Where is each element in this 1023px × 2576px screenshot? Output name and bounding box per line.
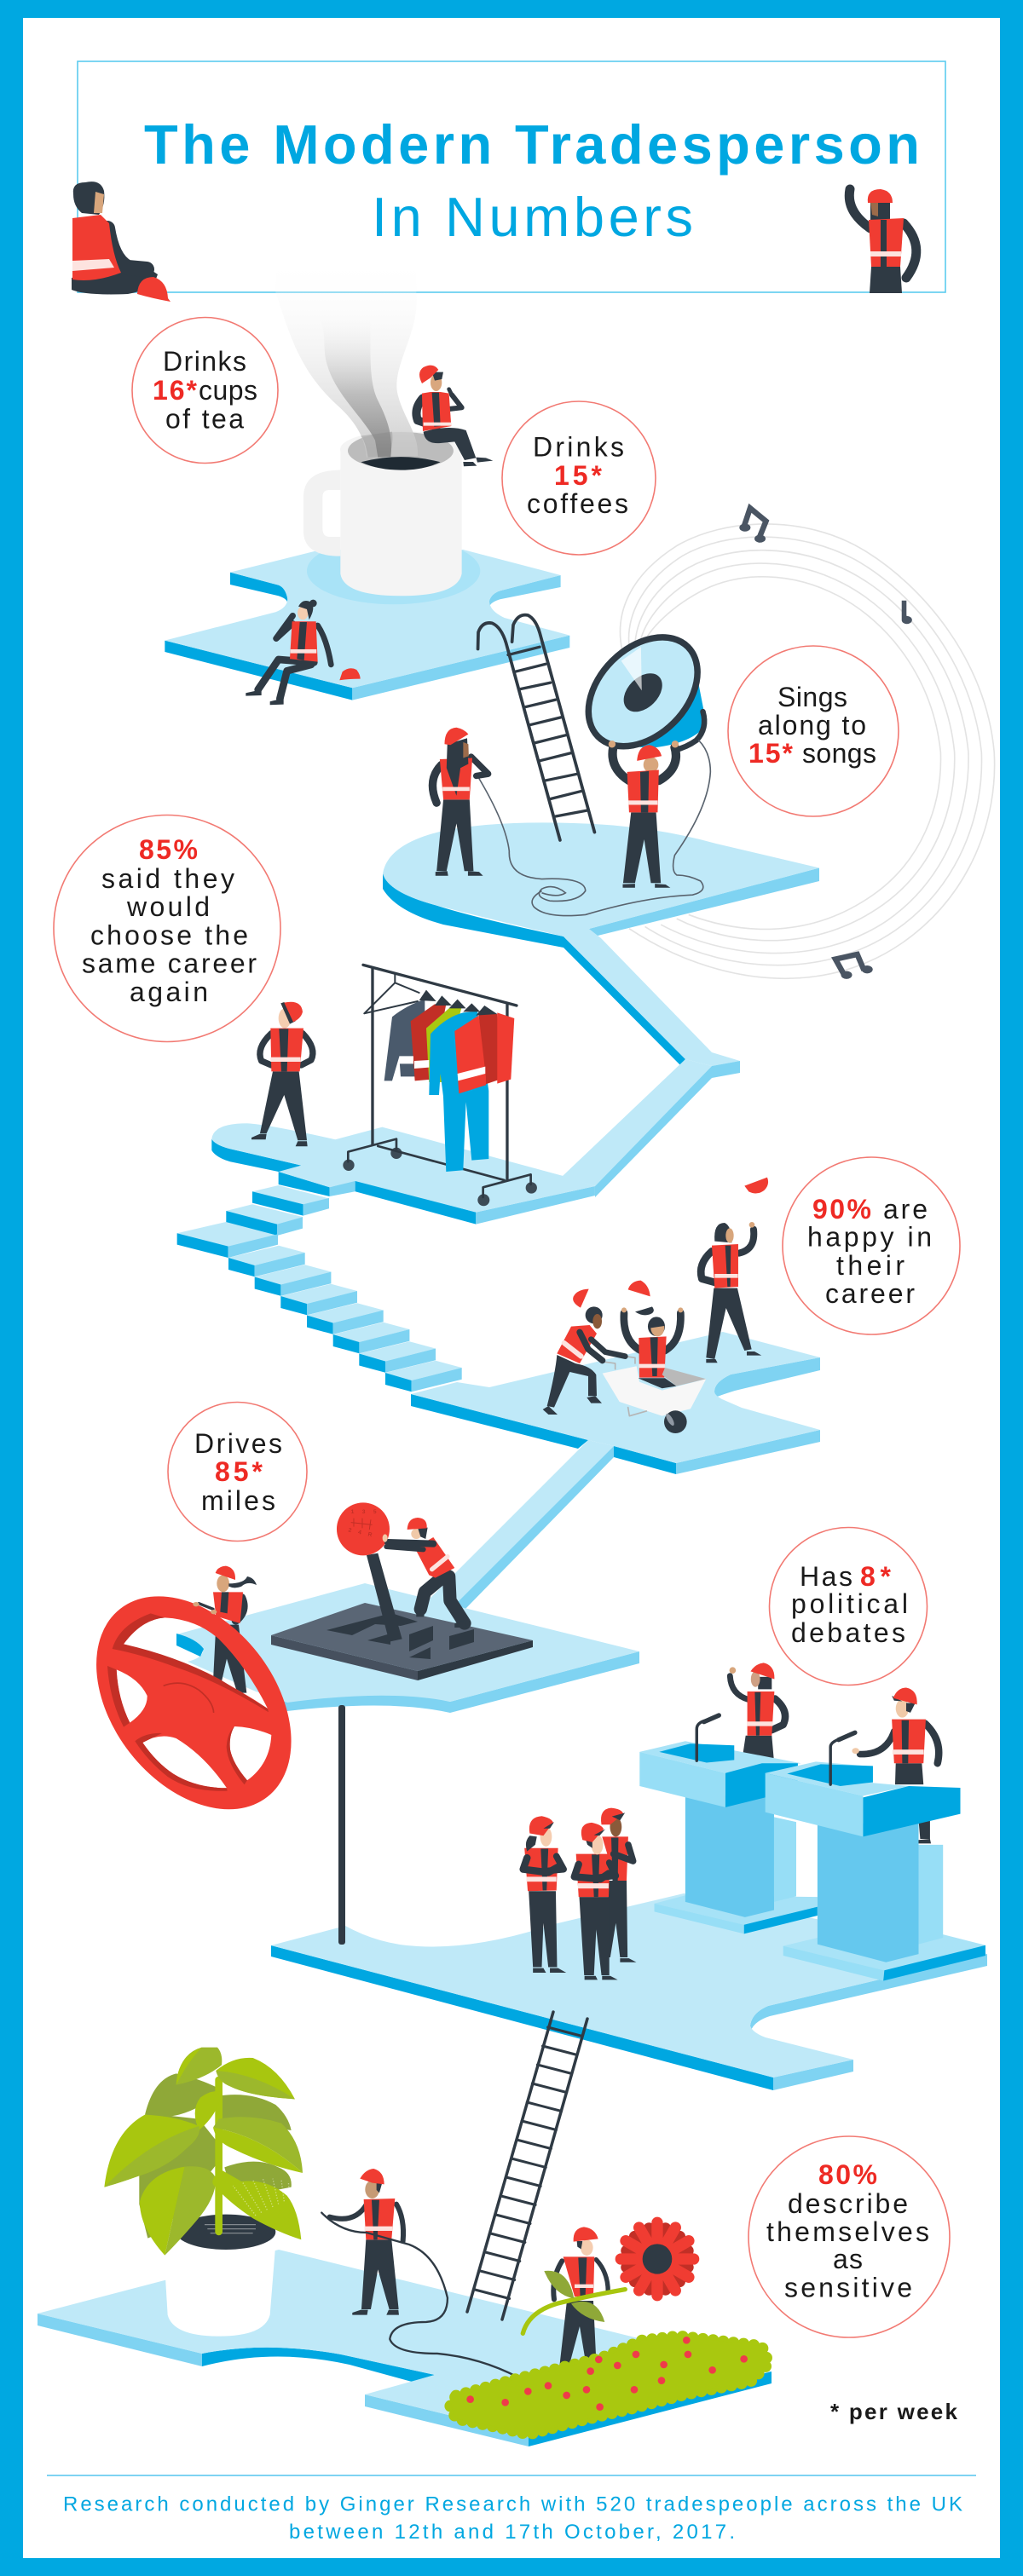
figure: middle worker in group xyxy=(575,1823,618,1980)
figure: seated worker at title xyxy=(72,182,170,302)
gear gate base xyxy=(271,1603,533,1680)
garden hose xyxy=(321,2213,518,2377)
platform 3 xyxy=(211,1123,595,1225)
callout: songs: along to xyxy=(758,710,866,741)
callout: coffees xyxy=(502,401,656,555)
figure: waving worker at title xyxy=(849,189,916,293)
gear stick: 1 3 5 xyxy=(351,1509,377,1515)
callout: happy in career: their xyxy=(836,1250,905,1281)
figure: woman in wheelbarrow xyxy=(621,1306,683,1378)
podium right xyxy=(783,1824,985,1981)
platform 1 xyxy=(165,550,569,700)
callout: miles: Drives xyxy=(194,1428,282,1459)
title: In Numbers xyxy=(372,186,693,248)
callout: cups of tea: cups xyxy=(199,375,257,406)
figure: worker pushing wheelbarrow xyxy=(543,1306,635,1415)
figure: driver behind steering wheel xyxy=(213,1566,257,1693)
pole xyxy=(338,1705,345,1945)
footer divider xyxy=(47,2475,976,2476)
hedge xyxy=(450,2337,769,2435)
callout: same career: would xyxy=(126,891,210,922)
callout: miles xyxy=(168,1403,307,1541)
callout: political debates: 8* xyxy=(860,1561,892,1592)
figure: worker pushing gear stick xyxy=(383,1518,467,1628)
callout: happy in career: are xyxy=(883,1194,928,1225)
title box xyxy=(78,61,945,292)
ladder between lower platforms xyxy=(467,2012,587,2320)
figure: worker looking at rack xyxy=(251,1002,313,1146)
callout: sensitive: as xyxy=(833,2244,863,2274)
panel: garden platform xyxy=(38,2250,772,2446)
callout: cups of tea: Drinks xyxy=(163,346,246,377)
microphone right xyxy=(830,1732,855,1784)
callout: same career: choose the xyxy=(90,920,248,951)
callout: happy in career: career xyxy=(825,1278,915,1309)
callout: political debates xyxy=(769,1527,928,1686)
callout: happy in career: happy in xyxy=(807,1222,932,1253)
microphone cord xyxy=(477,741,710,916)
panel: gear stick and drivers xyxy=(96,1502,467,1809)
icon: flying helmets xyxy=(573,1178,768,1308)
callout: same career: said they xyxy=(101,863,234,894)
figure: debater right xyxy=(852,1687,939,1843)
saucer xyxy=(307,550,481,605)
callout: coffees: 15* xyxy=(554,460,603,491)
icon: music note xyxy=(902,601,912,624)
callout: sensitive: themselves xyxy=(766,2216,929,2247)
figure: debater left xyxy=(730,1663,785,1761)
figure: worker sitting on mug xyxy=(416,366,493,466)
podium left xyxy=(655,1796,818,1933)
callout: coffees: coffees xyxy=(527,488,628,519)
flower xyxy=(523,2222,694,2333)
callout: same career: same career xyxy=(82,948,257,978)
callout: same career: again xyxy=(130,977,208,1007)
callout: miles: 85* xyxy=(215,1456,263,1487)
callout: sensitive: 80% xyxy=(818,2159,877,2190)
figure: left worker in group xyxy=(523,1816,566,1973)
callout: happy in career xyxy=(783,1157,960,1334)
callout: songs: 15* xyxy=(748,738,794,769)
wheelbarrow xyxy=(603,1366,706,1433)
panel: singing platform with ramp xyxy=(383,822,819,1197)
callout: songs: songs xyxy=(802,738,876,769)
steering wheel xyxy=(96,1596,292,1809)
callout: coffees: Drinks xyxy=(533,431,624,462)
callout: happy in career: 90% xyxy=(812,1194,871,1225)
figure: worker holding speaker xyxy=(609,741,679,888)
gear stick: 2 4 R xyxy=(348,1527,373,1538)
footer: research note xyxy=(63,2493,962,2544)
clothes rack xyxy=(343,965,537,1206)
callout: cups of tea: of tea xyxy=(165,404,244,435)
callout: songs xyxy=(728,646,899,816)
callout: political debates: Has xyxy=(800,1561,852,1592)
title: The Modern Tradesperson xyxy=(144,113,920,176)
callout: cups of tea xyxy=(132,317,278,464)
callout: miles: miles xyxy=(201,1485,275,1516)
icon: music note xyxy=(835,954,873,979)
note: per week: * per week xyxy=(830,2399,958,2424)
title xyxy=(144,113,920,248)
panel: platform 4 with ramp xyxy=(411,1332,820,1609)
figure: worker holding flower xyxy=(553,2227,608,2369)
speaker xyxy=(567,616,719,768)
panel: lower platform with podiums xyxy=(271,1893,987,2090)
panel: clothes rack platform xyxy=(177,965,595,1258)
footer: research note: Research conducted by Ginger Research with 520 tradespeople across the UK xyxy=(63,2493,962,2515)
gear stick xyxy=(337,1502,402,1642)
callout: sensitive xyxy=(748,2136,950,2337)
steam xyxy=(275,256,418,458)
callout: sensitive: describe xyxy=(788,2188,908,2219)
stairs lower flight xyxy=(228,1246,462,1392)
callout: same career: 85% xyxy=(139,834,198,865)
figure: woman celebrating xyxy=(701,1222,761,1363)
callout: sensitive: sensitive xyxy=(784,2272,912,2302)
music stave lines xyxy=(620,524,995,978)
figure: back worker in group xyxy=(601,1808,636,1962)
panel: wheelbarrow scene xyxy=(543,1178,768,1433)
callout: songs: Sings xyxy=(777,682,847,712)
plant pot xyxy=(162,2215,275,2337)
mug xyxy=(303,431,462,596)
figure: worker watering plant xyxy=(330,2169,403,2315)
callout: political debates: debates xyxy=(791,1617,905,1648)
panel: gear stick platform xyxy=(176,1583,639,1713)
panel: debate scene xyxy=(523,1663,985,1981)
panel: tea and coffee scene xyxy=(165,256,569,705)
driver hands on wheel xyxy=(193,1602,217,1614)
figure: singer xyxy=(432,728,488,876)
ladder up to tea platform xyxy=(478,615,594,840)
callout: cups of tea: 16* xyxy=(153,375,198,406)
callout: political debates: political xyxy=(791,1588,908,1619)
stairs upper flight xyxy=(177,1185,330,1258)
icon: helmet on floor xyxy=(339,668,361,680)
microphone left xyxy=(696,1715,719,1761)
podium right top xyxy=(766,1761,960,1836)
panel: plant and watering worker xyxy=(104,2048,518,2377)
panel: singing scene figures xyxy=(432,508,912,979)
podium left top xyxy=(639,1741,801,1807)
footer: research note: between 12th and 17th October, 2017. xyxy=(289,2521,735,2544)
callout: same career xyxy=(54,815,280,1041)
icon: music note xyxy=(739,508,766,543)
figure: woman sitting at platform edge xyxy=(246,600,331,705)
plant xyxy=(104,2048,303,2256)
panel: flower worker and hedge xyxy=(450,2222,769,2435)
